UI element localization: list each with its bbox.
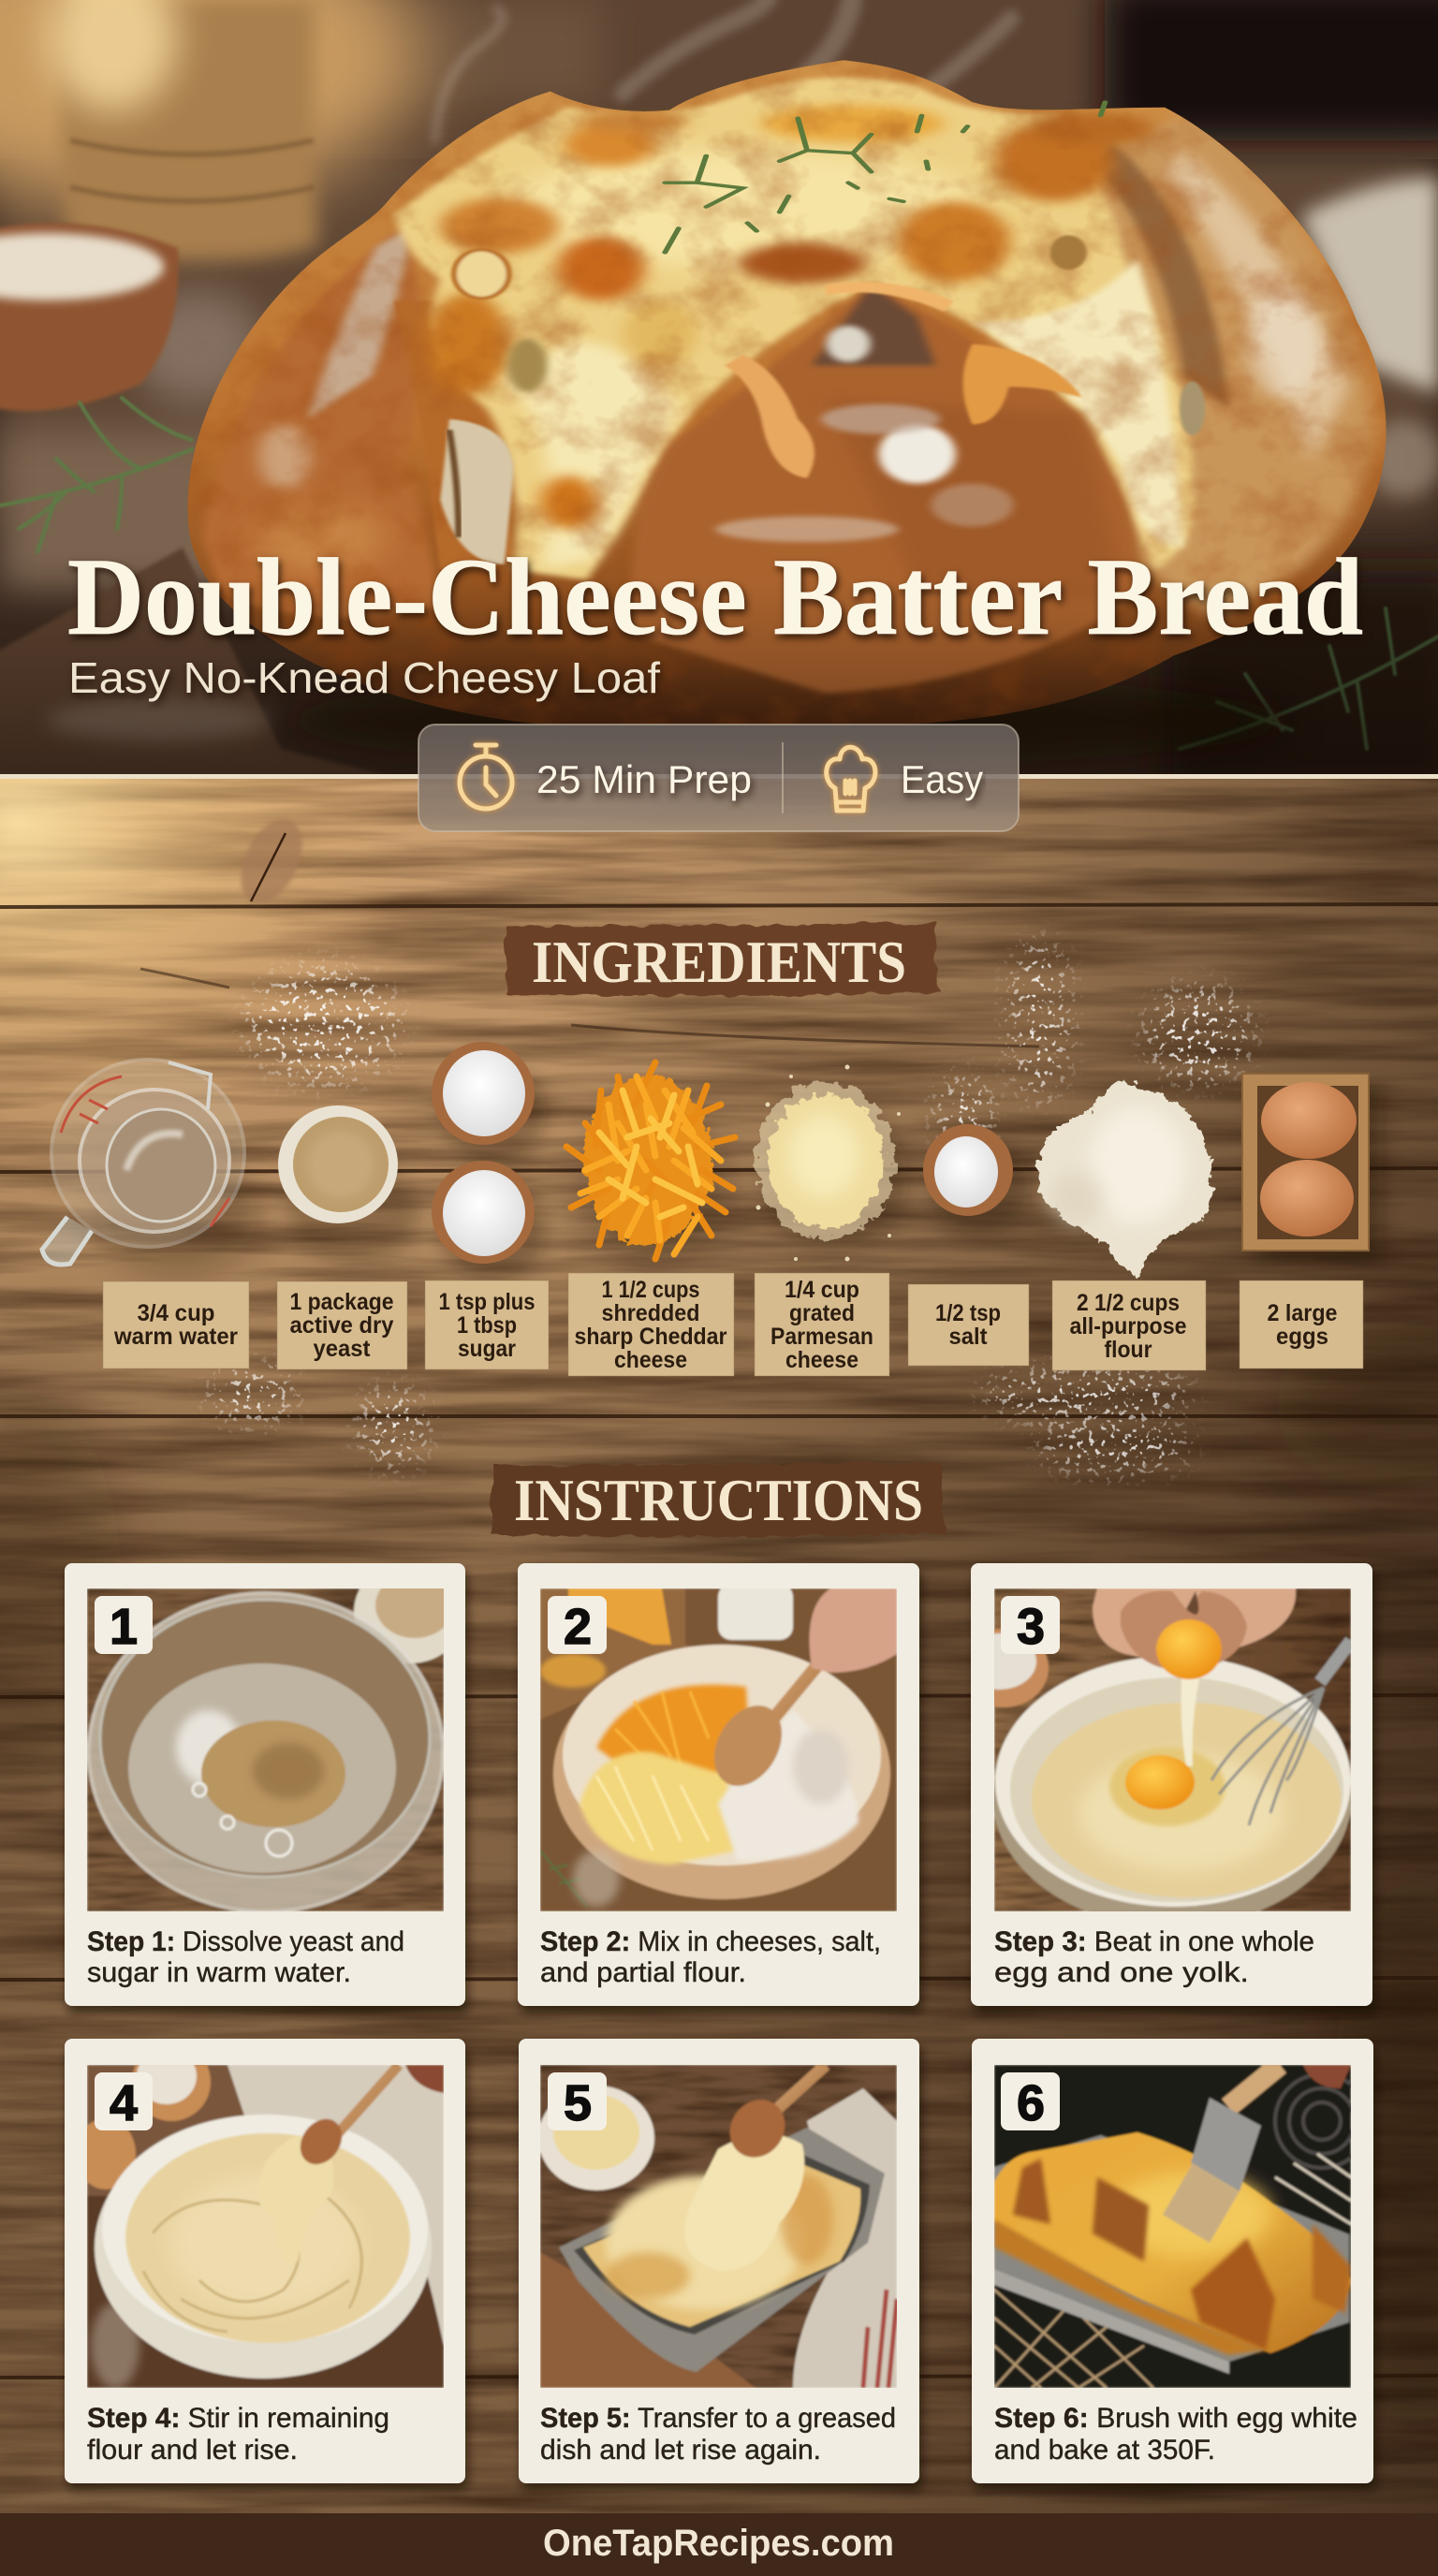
title: Double-Cheese Batter Bread (67, 535, 1363, 658)
label: flour: all-purpose (1069, 1313, 1187, 1339)
label: eggs: eggs (1276, 1324, 1328, 1350)
step 3 photo (959, 1588, 1352, 1927)
bread loaf (165, 49, 1413, 741)
step 3 text: Step 3: Beat in one whole (994, 1926, 1314, 1957)
step 6 text: Step 6: Brush with egg white (994, 2403, 1357, 2434)
label: sugar: 1 tbsp (457, 1312, 517, 1339)
label: cheddar (568, 1273, 734, 1376)
label: yeast: 1 package (290, 1289, 394, 1315)
label: sugar (425, 1281, 549, 1369)
label: cheddar: shredded (601, 1300, 700, 1326)
step 1 text: Step 1: Dissolve yeast and (87, 1926, 404, 1957)
steam (435, 0, 1011, 140)
label: water: warm water (113, 1324, 238, 1350)
panel: step 2 (518, 1563, 922, 2013)
browned cheese patches (427, 105, 1155, 529)
ingredient: salt bowl (923, 1124, 1030, 1236)
step 6 number badge (1001, 2072, 1060, 2131)
label: flour (1052, 1281, 1206, 1370)
step 5 number badge: 5 (564, 2075, 592, 2131)
label: parmesan: 1/4 cup (785, 1277, 859, 1303)
label: sugar: sugar (458, 1336, 516, 1362)
step 3 text: egg and one yolk. (994, 1957, 1249, 1988)
rosemary sprig right (1180, 608, 1438, 749)
wood background (0, 777, 1438, 2518)
step 5 photo (538, 2065, 897, 2388)
ingredient: warm water in measuring cup (42, 1060, 257, 1273)
step 6 number badge: 6 (1017, 2075, 1045, 2131)
prep time label: 25 Min Prep (536, 757, 752, 801)
step 5 text: Step 5: Transfer to a greased (540, 2403, 896, 2434)
icon: chef hat (827, 747, 875, 811)
step 2 number badge (548, 1596, 607, 1655)
step 6 text (994, 2403, 1357, 2466)
ingredient: sugar bowl top (432, 1042, 546, 1165)
badge: prep time and difficulty (418, 724, 1019, 831)
step 4 text (87, 2403, 389, 2466)
label: salt (908, 1284, 1029, 1366)
label: cheddar: 1 1/2 cups (601, 1277, 700, 1303)
badge divider (782, 742, 784, 813)
step 1 number badge: 1 (110, 1599, 138, 1655)
cheese (394, 78, 1194, 580)
label: flour: 2 1/2 cups (1077, 1290, 1180, 1316)
bread holes (440, 419, 514, 564)
label: salt: 1/2 tsp (935, 1300, 1001, 1326)
step 3 number badge: 3 (1017, 1599, 1045, 1655)
ingredient: flour pile (1037, 1080, 1213, 1278)
bread shadow (281, 674, 1292, 768)
heading: instructions: INSTRUCTIONS (514, 1467, 923, 1533)
step 2 text: and partial flour. (540, 1957, 746, 1988)
ingredient: sugar bowl bottom (432, 1161, 546, 1284)
flour dust on wood (211, 941, 1250, 1471)
label: parmesan: Parmesan (770, 1324, 873, 1350)
hero divider line (0, 774, 1438, 779)
step 2 number badge: 2 (564, 1599, 592, 1655)
step 1 text (87, 1926, 404, 1988)
hero photo: cheesy bread loaf (0, 0, 1438, 796)
heading: ingredients: INGREDIENTS (532, 929, 906, 995)
ingredient: grated parmesan (756, 1065, 908, 1262)
step 1 photo (87, 1560, 466, 1911)
step 3 text (994, 1926, 1314, 1988)
step 3 number badge (1001, 1596, 1060, 1655)
label: water: 3/4 cup (137, 1300, 215, 1326)
panel: step 6 (972, 2039, 1376, 2491)
step 5 text: dish and let rise again. (540, 2435, 821, 2466)
icon: stopwatch (460, 745, 512, 809)
step 2 text (540, 1926, 881, 1988)
centre crust wedge (631, 285, 1136, 693)
step 2 photo (540, 1584, 897, 1911)
label: parmesan: grated (789, 1300, 855, 1326)
title shade (0, 580, 1438, 777)
ingredient: yeast bowl (278, 1105, 419, 1264)
step 2 text: Step 2: Mix in cheeses, salt, (540, 1926, 881, 1957)
step 5 number badge (548, 2072, 607, 2131)
label: yeast: yeast (313, 1336, 371, 1362)
step 6 photo (994, 2065, 1369, 2388)
step 4 text: flour and let rise. (87, 2435, 298, 2466)
label: cheddar: sharp Cheddar (575, 1324, 727, 1350)
label: yeast (277, 1281, 407, 1369)
step 4 number badge: 4 (110, 2075, 138, 2131)
ingredient: shredded cheddar (566, 1062, 735, 1259)
subtitle: Easy No-Knead Cheesy Loaf (68, 653, 660, 702)
step 4 number badge (95, 2072, 153, 2131)
label: flour: flour (1105, 1337, 1152, 1363)
footer: OneTapRecipes.com (543, 2523, 894, 2564)
label: eggs (1240, 1281, 1363, 1368)
label: cheddar: cheese (614, 1347, 687, 1373)
panel: step 4 (65, 2039, 468, 2491)
label: yeast: active dry (290, 1312, 394, 1339)
panel: step 3 (959, 1563, 1375, 2013)
panel: step 1 (65, 1560, 468, 2013)
step 6 text: and bake at 350F. (994, 2435, 1215, 2466)
thyme leaves (665, 102, 1105, 253)
footer (0, 2513, 1438, 2576)
rosemary sprig left (0, 398, 192, 552)
label: parmesan: cheese (785, 1347, 858, 1373)
cheese drips (725, 355, 814, 478)
label: sugar: 1 tsp plus (438, 1289, 536, 1315)
panel: step 5 (519, 2039, 922, 2491)
difficulty label: Easy (901, 757, 983, 801)
label: parmesan (755, 1273, 889, 1376)
ingredient: eggs in crate (1242, 1074, 1383, 1264)
step 5 text (540, 2403, 896, 2466)
ingredient labels (103, 1273, 1363, 1376)
label: salt: salt (949, 1324, 988, 1350)
step 1 text: sugar in warm water. (87, 1957, 351, 1988)
step 4 photo (76, 2042, 444, 2389)
step 1 number badge (95, 1596, 153, 1655)
label: eggs: 2 large (1268, 1300, 1338, 1326)
step 4 text: Step 4: Stir in remaining (87, 2403, 389, 2434)
label: water (103, 1281, 249, 1368)
